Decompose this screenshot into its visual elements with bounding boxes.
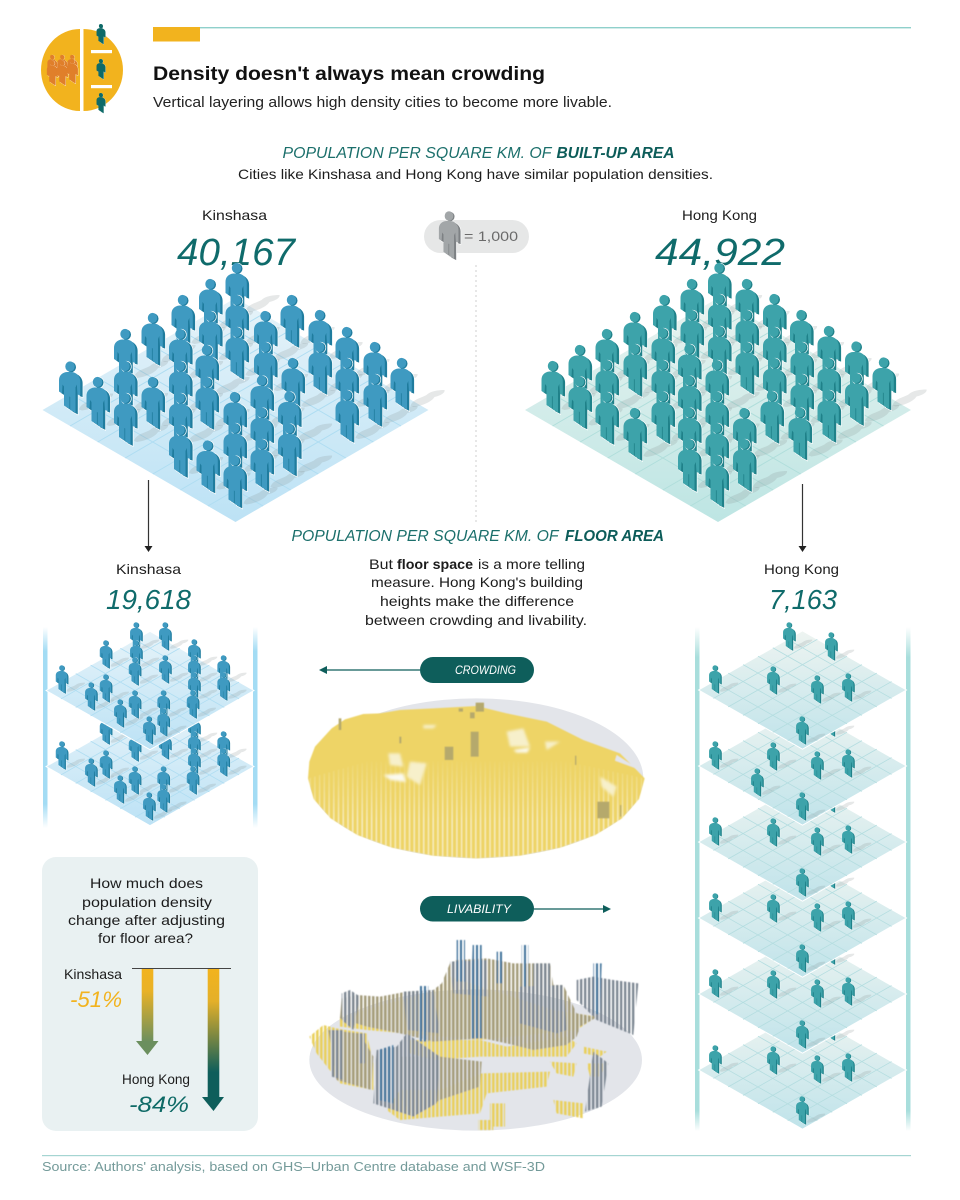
value: -51%: -51% — [70, 987, 122, 1012]
chart: livability 3D density surface — [309, 940, 642, 1131]
label: Kinshasa floor area: Kinshasa — [116, 561, 181, 577]
heading: floor area: FLOOR AREA — [565, 528, 664, 545]
chart: Kinshasa floors stack — [43, 622, 258, 828]
arrow: Kinshasa -51% — [136, 969, 158, 1055]
legend: one figure equals 1,000: = 1,000 — [464, 228, 518, 244]
number: 40,167: 40,167 — [177, 232, 297, 274]
pill: livability with arrow: LIVABILITY — [447, 902, 512, 916]
explanatory text: But — [369, 556, 393, 572]
panel question — [68, 875, 225, 946]
label: Hong Kong: Hong Kong — [682, 207, 757, 223]
heading: floor area: POPULATION PER SQUARE KM. OF — [292, 528, 560, 545]
footer rule — [42, 1155, 911, 1156]
chart: Kinshasa built-up density plate — [43, 263, 445, 522]
chart: Hong Kong built-up density plate — [525, 263, 927, 522]
number: 19,618: 19,618 — [106, 584, 191, 615]
icon: density vs vertical layering — [41, 24, 123, 113]
label: Hong Kong floor area: Hong Kong — [764, 561, 839, 577]
explanatory text: measure. Hong Kong's building — [371, 574, 583, 590]
pill: livability with arrow — [420, 896, 611, 922]
panel question: population density — [82, 894, 212, 910]
subtitle: Vertical layering allows high density cities to become more livable. — [153, 95, 612, 111]
label: Kinshasa: Kinshasa — [64, 966, 122, 982]
explanatory text: floor space — [397, 556, 473, 572]
arrow: Kinshasa down — [144, 480, 152, 552]
title: Density doesn't always mean crowding — [153, 64, 545, 85]
arrow: Hong Kong -84% — [202, 969, 224, 1111]
number: 44,922: 44,922 — [655, 232, 785, 274]
heading: built-up area — [282, 145, 674, 162]
yellow header tab — [153, 27, 200, 42]
number: 7,163: 7,163 — [769, 584, 837, 615]
explanatory text: heights make the difference — [380, 593, 574, 609]
label: Kinshasa: Kinshasa — [202, 207, 267, 223]
explanatory text: between crowding and livability. — [365, 612, 587, 628]
panel: density change after floor-area adjustment — [42, 857, 258, 1131]
source line: Source: Authors' analysis, based on GHS–Urban Centre database and WSF-3D — [42, 1160, 545, 1174]
legend: one figure equals 1,000 — [424, 211, 529, 260]
label: Hong Kong: Hong Kong — [122, 1071, 190, 1087]
heading: built-up area: POPULATION PER SQUARE KM. OF — [282, 145, 553, 162]
explanatory text — [365, 556, 587, 628]
header rule — [153, 27, 911, 28]
heading: built-up area: BUILT-UP AREA — [556, 145, 674, 162]
intro text: Cities like Kinshasa and Hong Kong have similar population densities. — [238, 166, 713, 182]
explanatory text: is a more telling — [478, 556, 585, 572]
panel question: for floor area? — [98, 930, 193, 946]
value: -84%: -84% — [129, 1092, 189, 1117]
pill: crowding with arrow — [319, 657, 534, 683]
pill: crowding with arrow: CROWDING — [455, 663, 516, 677]
panel question: change after adjusting — [68, 912, 225, 928]
chart: crowding 3D density surface — [308, 698, 645, 858]
arrow: Hong Kong down — [798, 484, 806, 552]
chart: Hong Kong floors stack — [695, 622, 910, 1131]
panel question: How much does — [90, 875, 203, 891]
